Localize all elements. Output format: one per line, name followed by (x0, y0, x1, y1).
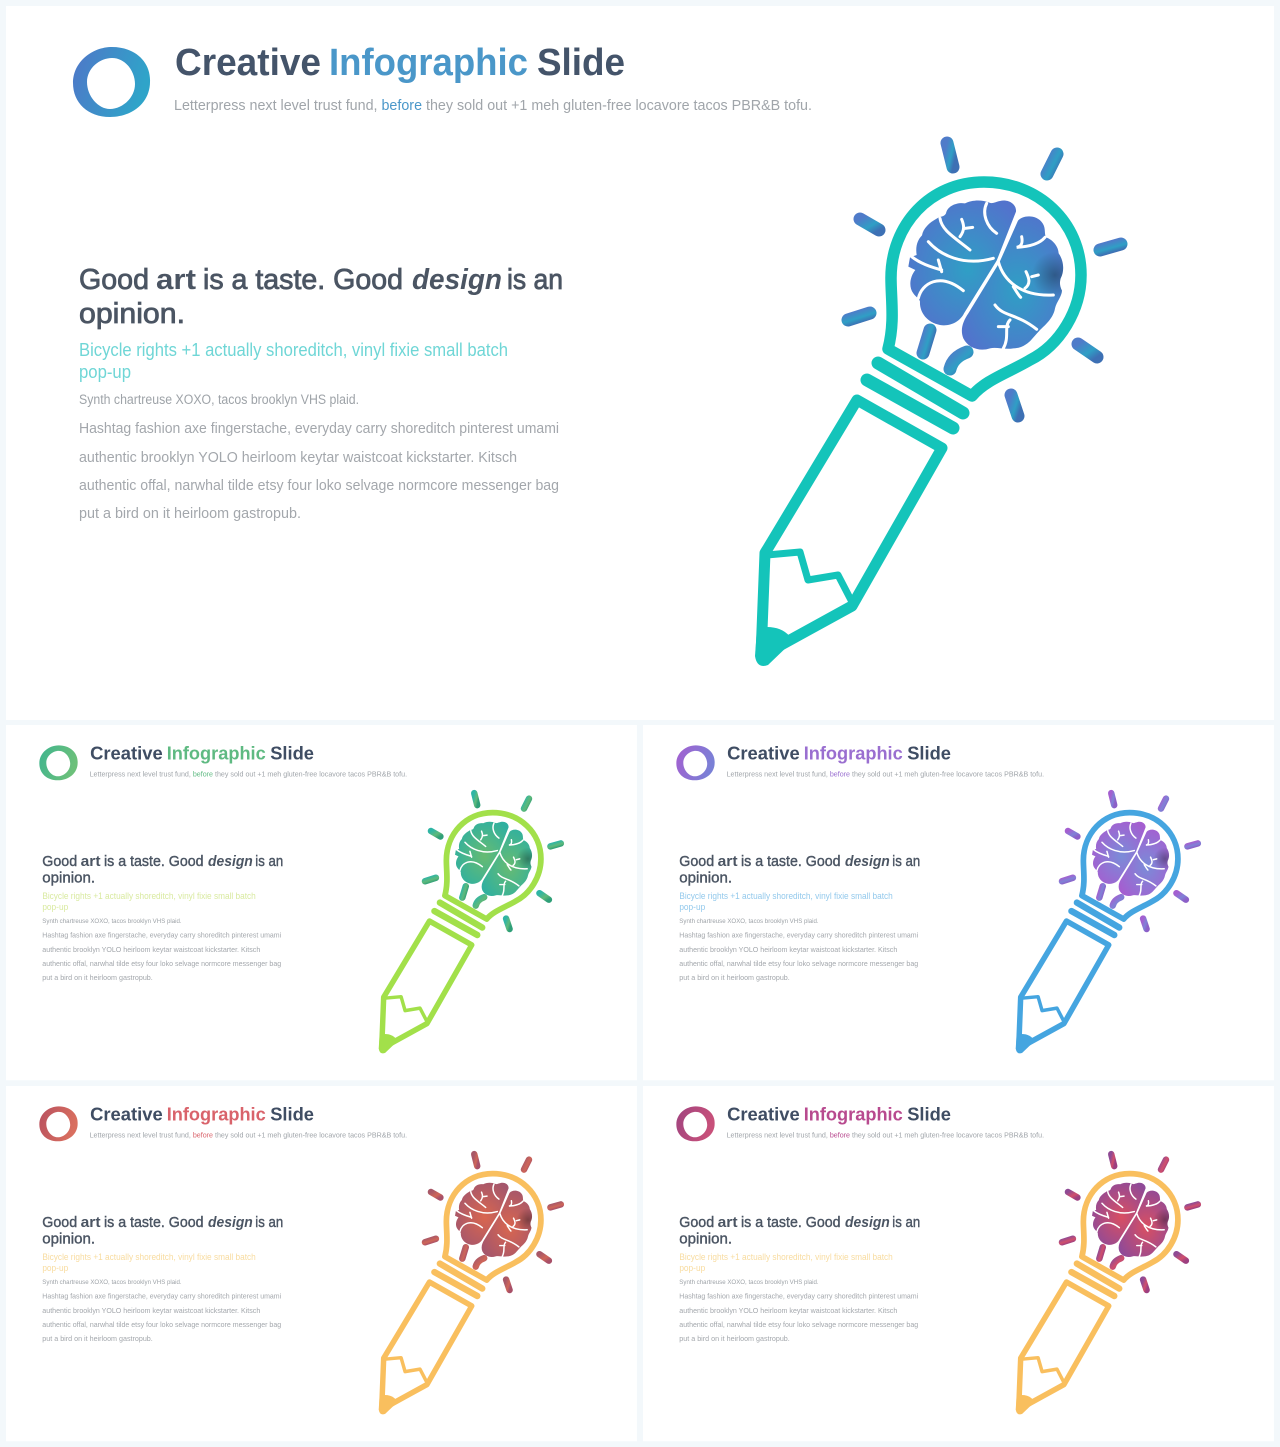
title: Creative (90, 1104, 163, 1125)
icon: lightbulb pencil with brain (379, 793, 561, 1053)
heading: opinion. (679, 1232, 732, 1248)
heading: is a taste. Good (104, 1215, 204, 1231)
short note: Synth chartreuse XOXO, tacos brooklyn VHS plaid. (679, 1279, 819, 1286)
subheading: pop-up (42, 902, 68, 912)
body copy (679, 930, 918, 982)
heading: is an (255, 854, 283, 870)
short note: Synth chartreuse XOXO, tacos brooklyn VHS plaid. (679, 918, 819, 925)
subheading: Bicycle rights +1 actually shoreditch, vinyl fixie small batch (42, 891, 256, 901)
body copy: authentic brooklyn YOLO heirloom keytar waistcoat kickstarter. Kitsch (79, 449, 517, 466)
heading (679, 854, 920, 887)
heading: is a taste. Good (203, 264, 403, 296)
title: Slide (270, 743, 314, 764)
heading: Good (679, 1215, 714, 1231)
body copy: authentic brooklyn YOLO heirloom keytar waistcoat kickstarter. Kitsch (679, 945, 897, 954)
title: Infographic (329, 42, 528, 84)
heading: is an (892, 1215, 920, 1231)
panel: green variant (6, 725, 637, 1080)
icon: lightbulb pencil with brain (379, 1154, 561, 1414)
body copy: put a bird on it heirloom gastropub. (79, 505, 301, 522)
panel: purple variant (643, 725, 1274, 1080)
title: Creative (727, 1104, 800, 1125)
title: Slide (907, 743, 951, 764)
subheading (42, 891, 256, 912)
heading: is an (255, 1215, 283, 1231)
body copy (679, 1291, 918, 1343)
heading: Good (42, 854, 77, 870)
body copy: put a bird on it heirloom gastropub. (679, 1334, 790, 1343)
subheading: Bicycle rights +1 actually shoreditch, vinyl fixie small batch (679, 891, 893, 901)
subheading: pop-up (679, 902, 705, 912)
pencil body (755, 400, 942, 666)
body copy (42, 930, 281, 982)
subheading (42, 1252, 256, 1273)
logo ring (676, 745, 715, 780)
logo ring (39, 1106, 78, 1141)
title: Infographic (804, 743, 903, 764)
heading (42, 1215, 283, 1248)
icon: lightbulb pencil with brain (1016, 1154, 1198, 1414)
teal subheading: pop-up (79, 361, 131, 382)
body copy: put a bird on it heirloom gastropub. (42, 973, 153, 982)
heading: design (845, 1215, 890, 1231)
title (175, 42, 625, 84)
title (727, 743, 951, 764)
body copy: authentic offal, narwhal tilde etsy four loko selvage normcore messenger bag (42, 1320, 281, 1329)
subtitle: Letterpress next level trust fund, before they sold out +1 meh gluten-free locavore tacos PBR&B tofu. (727, 1131, 1044, 1140)
brain (908, 200, 1078, 350)
heading (79, 264, 563, 330)
heading: is a taste. Good (104, 854, 204, 870)
heading: opinion. (42, 871, 95, 887)
heading: opinion. (42, 1232, 95, 1248)
subheading: Bicycle rights +1 actually shoreditch, vinyl fixie small batch (42, 1252, 256, 1262)
icon: lightbulb pencil with brain (1016, 793, 1198, 1053)
body copy: Hashtag fashion axe fingerstache, everyday carry shoreditch pinterest umami (79, 420, 559, 437)
body copy: authentic offal, narwhal tilde etsy four loko selvage normcore messenger bag (679, 1320, 918, 1329)
subheading: Bicycle rights +1 actually shoreditch, vinyl fixie small batch (679, 1252, 893, 1262)
heading: art (718, 854, 738, 870)
title: Infographic (167, 1104, 266, 1125)
icon: lightbulb pencil with brain (755, 143, 1121, 666)
body copy (42, 1291, 281, 1343)
body copy: Hashtag fashion axe fingerstache, everyday carry shoreditch pinterest umami (42, 930, 281, 939)
body copy: put a bird on it heirloom gastropub. (42, 1334, 153, 1343)
heading: design (845, 854, 890, 870)
body copy: Hashtag fashion axe fingerstache, everyday carry shoreditch pinterest umami (679, 930, 918, 939)
body copy: authentic brooklyn YOLO heirloom keytar waistcoat kickstarter. Kitsch (42, 945, 260, 954)
subtitle: Letterpress next level trust fund, before they sold out +1 meh gluten-free locavore tacos PBR&B tofu. (90, 1131, 407, 1140)
logo ring (73, 47, 150, 117)
body copy: authentic brooklyn YOLO heirloom keytar waistcoat kickstarter. Kitsch (679, 1306, 897, 1315)
heading: art (81, 854, 101, 870)
title: Slide (270, 1104, 314, 1125)
heading: Good (79, 264, 149, 296)
subtitle: Letterpress next level trust fund, before they sold out +1 meh gluten-free locavore tacos PBR&B tofu. (174, 98, 812, 114)
bulb outline (888, 182, 1081, 396)
teal subheading (79, 339, 508, 382)
heading: art (718, 1215, 738, 1231)
title: Slide (537, 42, 625, 84)
body copy: authentic offal, narwhal tilde etsy four loko selvage normcore messenger bag (79, 477, 559, 494)
subtitle: Letterpress next level trust fund, before they sold out +1 meh gluten-free locavore tacos PBR&B tofu. (727, 770, 1044, 779)
heading (679, 1215, 920, 1248)
body copy (79, 420, 559, 522)
heading: is a taste. Good (741, 1215, 841, 1231)
logo ring (676, 1106, 715, 1141)
short note: Synth chartreuse XOXO, tacos brooklyn VHS plaid. (42, 1279, 182, 1286)
heading: opinion. (679, 871, 732, 887)
subheading (679, 1252, 893, 1273)
title (90, 1104, 314, 1125)
subtitle: Letterpress next level trust fund, before they sold out +1 meh gluten-free locavore tacos PBR&B tofu. (90, 770, 407, 779)
teal subheading: Bicycle rights +1 actually shoreditch, vinyl fixie small batch (79, 339, 508, 360)
heading: Good (679, 854, 714, 870)
body copy: authentic offal, narwhal tilde etsy four loko selvage normcore messenger bag (42, 959, 281, 968)
body copy: authentic brooklyn YOLO heirloom keytar waistcoat kickstarter. Kitsch (42, 1306, 260, 1315)
heading: art (81, 1215, 101, 1231)
subheading: pop-up (42, 1263, 68, 1273)
short note: Synth chartreuse XOXO, tacos brooklyn VHS plaid. (79, 392, 359, 407)
heading: is a taste. Good (741, 854, 841, 870)
heading: design (412, 264, 502, 296)
panel: main slide (6, 6, 1274, 720)
subheading: pop-up (679, 1263, 705, 1273)
title: Creative (90, 743, 163, 764)
heading: is an (892, 854, 920, 870)
title: Slide (907, 1104, 951, 1125)
title (727, 1104, 951, 1125)
heading: is an (507, 264, 563, 296)
heading: design (208, 854, 253, 870)
bulb base bars (867, 363, 963, 428)
body copy: Hashtag fashion axe fingerstache, everyday carry shoreditch pinterest umami (42, 1291, 281, 1300)
title: Creative (175, 42, 321, 84)
subheading (679, 891, 893, 912)
heading (42, 854, 283, 887)
logo ring (39, 745, 78, 780)
panel: red variant (6, 1086, 637, 1441)
body copy: put a bird on it heirloom gastropub. (679, 973, 790, 982)
body copy: Hashtag fashion axe fingerstache, everyday carry shoreditch pinterest umami (679, 1291, 918, 1300)
heading: Good (42, 1215, 77, 1231)
panel: magenta variant (643, 1086, 1274, 1441)
title (90, 743, 314, 764)
title: Infographic (804, 1104, 903, 1125)
title: Creative (727, 743, 800, 764)
title: Infographic (167, 743, 266, 764)
heading: opinion. (79, 298, 185, 330)
light rays (848, 143, 1121, 416)
short note: Synth chartreuse XOXO, tacos brooklyn VHS plaid. (42, 918, 182, 925)
body copy: authentic offal, narwhal tilde etsy four loko selvage normcore messenger bag (679, 959, 918, 968)
heading: art (156, 264, 196, 296)
heading: design (208, 1215, 253, 1231)
